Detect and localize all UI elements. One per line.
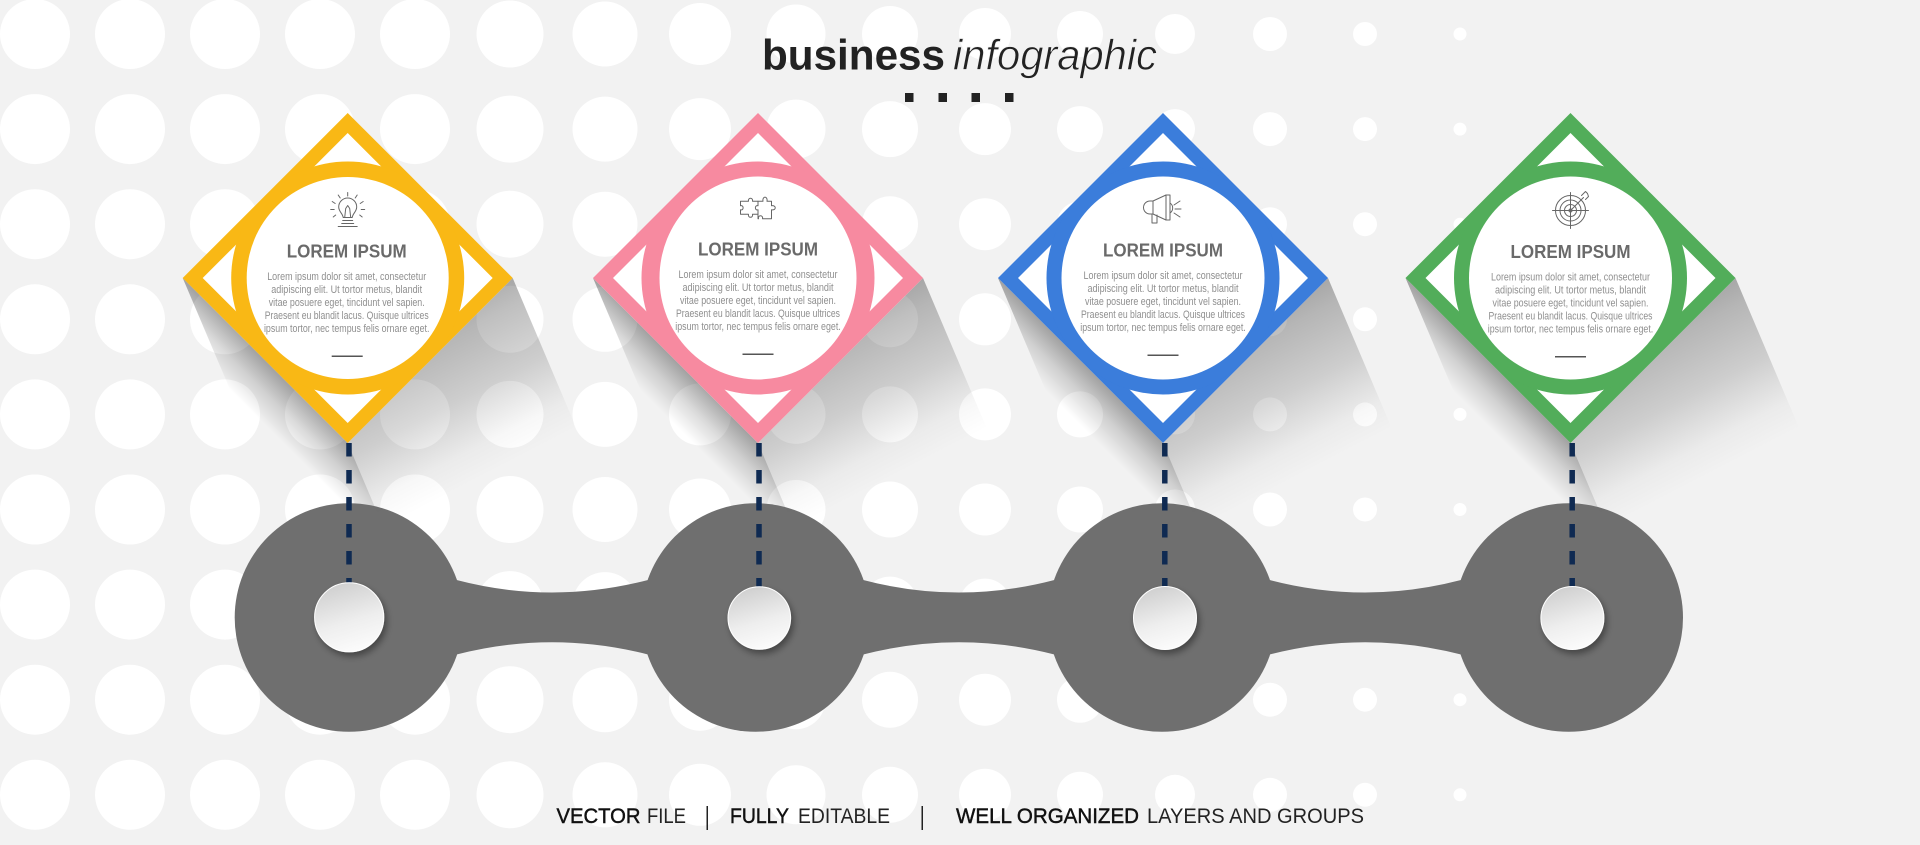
title dots (905, 93, 1014, 102)
body text: ipsum tortor, nec tempus felis ornare eget. (264, 323, 429, 335)
panel: green card (1406, 113, 1736, 443)
divider (332, 356, 363, 357)
body text: ipsum tortor, nec tempus felis ornare eget. (1080, 322, 1246, 334)
heading: LOREM IPSUM (1103, 240, 1223, 261)
body text: Lorem ipsum dolor sit amet, consectetur (678, 269, 838, 281)
title: infographic (953, 32, 1157, 80)
footer tagline (556, 805, 1364, 830)
body text: Lorem ipsum dolor sit amet, consectetur (1491, 272, 1650, 284)
icon: light bulb (331, 192, 365, 226)
body text: adipiscing elit. Ut tortor metus, blandit (271, 284, 423, 296)
heading: LOREM IPSUM (698, 239, 818, 260)
icon: megaphone (1144, 195, 1181, 223)
body text: vitae posuere eget, tincidunt vel sapien. (269, 297, 425, 309)
heading: LOREM IPSUM (287, 241, 407, 262)
body text (264, 271, 429, 335)
body text: Praesent eu blandit lacus. Quisque ultrices (1081, 309, 1245, 321)
long shadows (183, 278, 1806, 608)
body text (1080, 270, 1246, 334)
body text: adipiscing elit. Ut tortor metus, blandit (1088, 283, 1239, 295)
footer tagline: LAYERS AND GROUPS (1147, 805, 1364, 828)
shadow cast on timeline circles (348, 278, 1806, 608)
footer tagline: EDITABLE (798, 805, 890, 828)
body text: Lorem ipsum dolor sit amet, consectetur (267, 271, 426, 283)
footer tagline: FILE (647, 805, 686, 828)
title (762, 32, 1157, 80)
title: business (762, 32, 945, 80)
body text: Lorem ipsum dolor sit amet, consectetur (1084, 270, 1243, 282)
dashed connector lines (349, 443, 1572, 592)
icon: puzzle (740, 197, 775, 219)
body text: Praesent eu blandit lacus. Quisque ultrices (1488, 310, 1653, 322)
panel: blue card (998, 113, 1328, 443)
body text: vitae posuere eget, tincidunt vel sapien. (1492, 298, 1648, 310)
footer tagline: WELL ORGANIZED (956, 805, 1139, 828)
body text: vitae posuere eget, tincidunt vel sapien. (1085, 296, 1241, 308)
body text: adipiscing elit. Ut tortor metus, blandit (682, 282, 834, 294)
footer tagline: FULLY (730, 805, 789, 828)
body text: ipsum tortor, nec tempus felis ornare eget. (1488, 323, 1653, 335)
body text (675, 269, 841, 333)
panel: yellow card (183, 113, 513, 443)
icon: target (1552, 192, 1588, 228)
heading: LOREM IPSUM (1510, 241, 1630, 262)
body text: vitae posuere eget, tincidunt vel sapien. (680, 295, 836, 307)
body text (1488, 272, 1653, 335)
body text: ipsum tortor, nec tempus felis ornare eget. (675, 321, 841, 333)
timeline: grey circles and connectors (235, 503, 1683, 732)
timeline knobs (315, 583, 1604, 652)
footer tagline: VECTOR (556, 805, 640, 828)
body text: adipiscing elit. Ut tortor metus, blandit (1495, 284, 1647, 296)
divider (1148, 354, 1178, 356)
divider (1555, 356, 1586, 358)
body text: Praesent eu blandit lacus. Quisque ultrices (265, 310, 429, 322)
divider (742, 354, 774, 355)
body text: Praesent eu blandit lacus. Quisque ultrices (676, 308, 840, 320)
panel: pink card (593, 113, 923, 443)
